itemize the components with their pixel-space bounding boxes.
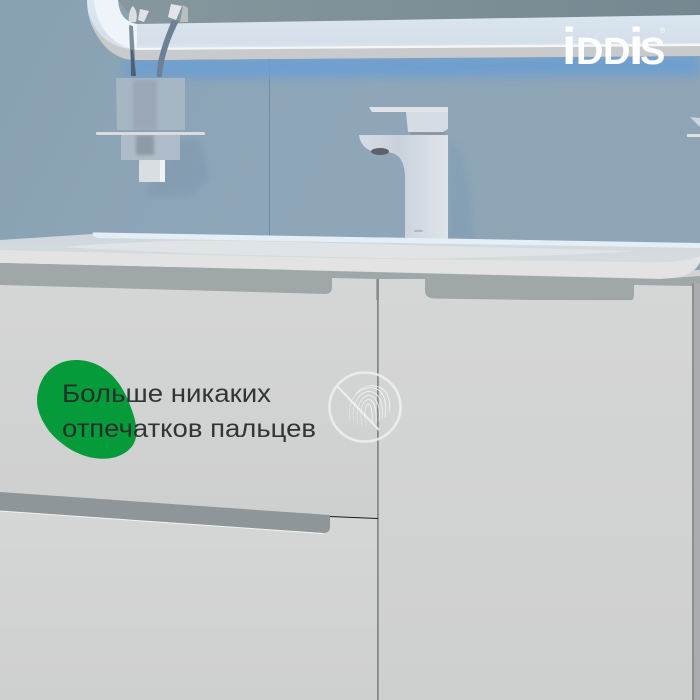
caption line 1: Больше никаких — [62, 380, 272, 408]
faucet mark: iddis — [414, 228, 423, 233]
wall tile joint — [269, 58, 270, 236]
logo: D — [603, 31, 630, 73]
wall — [0, 0, 700, 270]
countertop with basin — [0, 232, 700, 279]
cabinet recess below countertop — [0, 263, 700, 300]
caption — [62, 380, 316, 443]
right accessory — [687, 117, 700, 137]
logo: S — [640, 31, 665, 73]
lower left drawer — [0, 511, 378, 700]
door seam — [377, 279, 379, 700]
upper left drawer — [0, 278, 376, 516]
right door — [379, 279, 692, 700]
green blob — [37, 360, 136, 459]
logo: i — [629, 18, 643, 76]
icon: no fingerprints — [330, 372, 400, 442]
caption line 2: отпечатков пальцев — [62, 415, 316, 443]
logo registered mark: ® — [660, 27, 666, 35]
cabinet side panel — [692, 283, 700, 700]
faucet — [359, 107, 476, 244]
glass tumbler on shelf — [96, 78, 210, 195]
logo: D — [576, 31, 603, 73]
mirror with illuminated frame — [87, 0, 700, 78]
drawer handle recess — [0, 492, 330, 533]
cabinet doors — [0, 278, 700, 700]
toothbrushes — [129, 4, 188, 77]
logo: i — [562, 18, 576, 76]
